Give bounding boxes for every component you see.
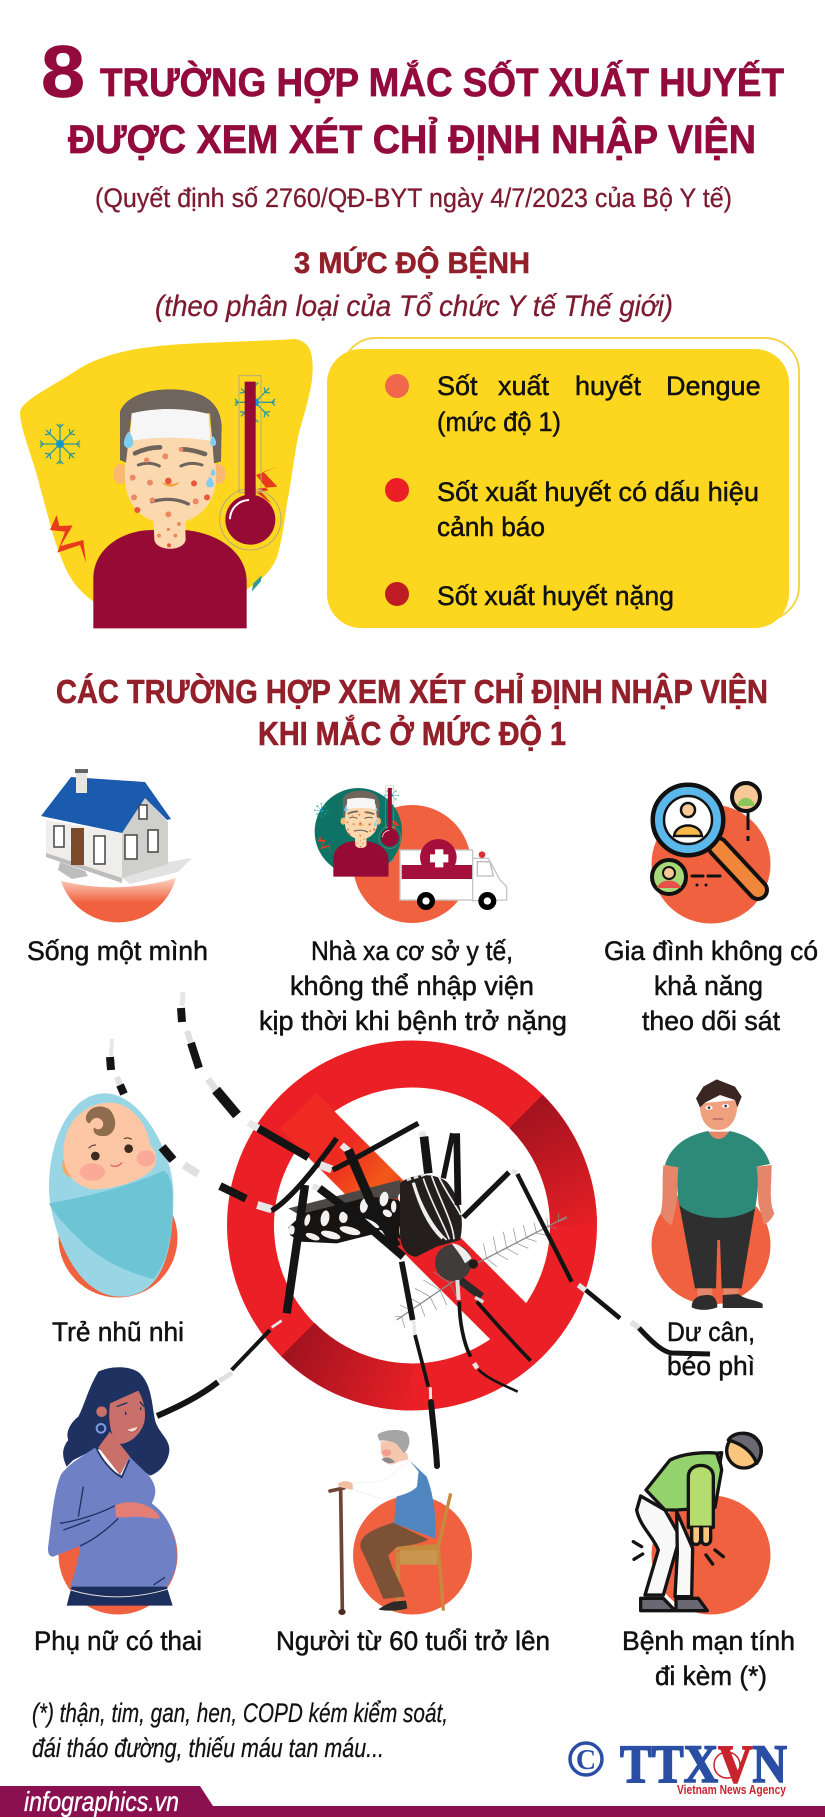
label: Trẻ nhũ nhi	[52, 1317, 184, 1347]
case: pregnant women	[34, 1367, 202, 1656]
footer text: infographics.vn	[24, 1786, 179, 1817]
icon: orange disc	[652, 1496, 770, 1614]
prohibition sign	[250, 1064, 574, 1387]
level 2 text: Sốt xuất huyết có dấu hiệu	[437, 477, 759, 507]
panel: three severity levels	[327, 338, 799, 628]
section heading	[56, 673, 768, 752]
level 1 text	[437, 371, 761, 437]
footnote	[32, 1698, 448, 1763]
mosquito head and proboscis	[435, 1243, 483, 1302]
label: Dư cân,	[667, 1317, 755, 1347]
heading: 3 levels: 3 MỨC ĐỘ BỆNH	[294, 246, 530, 280]
title: ĐƯỢC XEM XÉT CHỈ ĐỊNH NHẬP VIỆN	[68, 116, 756, 162]
footnote: (*) thận, tim, gan, hen, COPD kém kiểm soát,	[32, 1698, 448, 1728]
level 3 bullet	[385, 582, 409, 606]
label: khả năng	[654, 971, 763, 1001]
title: TRƯỜNG HỢP MẮC SỐT XUẤT HUYẾT	[100, 59, 784, 105]
level 1 text: Dengue	[666, 371, 761, 401]
heading note: (theo phân loại của Tổ chức Y tế Thế giới)	[155, 290, 673, 323]
case: living alone	[27, 769, 208, 966]
label: kịp thời khi bệnh trở nặng	[259, 1006, 567, 1036]
mosquito antennae	[395, 1213, 567, 1328]
label: theo dõi sát	[642, 1006, 780, 1036]
label: Gia đình không có	[604, 936, 818, 966]
case: family unable to monitor	[604, 783, 818, 1036]
icon: orange disc	[652, 1186, 770, 1304]
icon: orange disc	[58, 1178, 178, 1298]
section heading: KHI MẮC Ở MỨC ĐỘ 1	[258, 714, 566, 752]
level 1 text: (mức độ 1)	[437, 407, 561, 437]
mosquito wing and abdomen	[288, 1180, 430, 1246]
label: đi kèm (*)	[655, 1661, 767, 1691]
mosquito lower leg	[431, 1402, 437, 1466]
label: Nhà xa cơ sở y tế,	[311, 936, 513, 966]
title: 8	[41, 32, 85, 113]
icon: overweight man	[661, 1079, 774, 1310]
subtitle: (Quyết định số 2760/QĐ-BYT ngày 4/7/2023 của Bộ Y tế)	[95, 183, 732, 213]
label: Người từ 60 tuổi trở lên	[276, 1626, 550, 1656]
icon: elderly man on chair	[330, 1430, 451, 1615]
icon: orange disc	[652, 804, 770, 924]
icon: pregnant woman	[48, 1367, 177, 1606]
label	[604, 936, 818, 1036]
level 2 text: cảnh báo	[437, 512, 545, 542]
level 1 text: huyết	[575, 371, 642, 401]
case: infants	[49, 1093, 184, 1347]
icon: orange disc	[353, 1496, 472, 1614]
case: aged 60 and above	[276, 1430, 550, 1656]
icon: house	[41, 769, 192, 884]
title	[41, 32, 784, 162]
icon: orange disc	[58, 1496, 178, 1614]
logo: TTXVN: TTXVN	[620, 1734, 787, 1794]
logo: TTXVN: C	[576, 1745, 596, 1776]
logo: TTXVN: Vietnam News Agency	[677, 1783, 786, 1797]
footer band	[0, 1786, 825, 1817]
level 1 text: xuất	[498, 371, 550, 401]
case: far from medical facility	[259, 786, 567, 1036]
case: chronic disease	[622, 1433, 795, 1691]
icon: baby	[49, 1093, 173, 1297]
label	[622, 1626, 795, 1691]
icon: patient and ambulance	[314, 786, 507, 910]
mosquito thorax	[400, 1174, 462, 1257]
level 2 bullet	[385, 478, 409, 502]
icon: orange disc	[353, 805, 471, 923]
level 1 bullet	[385, 374, 409, 398]
illustration: sick man	[40, 376, 281, 628]
case: overweight	[652, 1079, 774, 1381]
level 1 text: Sốt	[437, 371, 478, 401]
mosquito	[220, 1100, 620, 1400]
illustration: yellow blob	[20, 339, 313, 602]
footnote: đái tháo đường, thiếu máu tan máu...	[32, 1733, 384, 1763]
label: không thể nhập viện	[290, 971, 534, 1001]
label: béo phì	[667, 1351, 755, 1381]
icon: man with knee pain	[633, 1433, 761, 1611]
mosquito legs	[220, 1100, 620, 1400]
label	[259, 936, 567, 1036]
icon: house base	[61, 878, 176, 922]
label: Sống một mình	[27, 936, 208, 966]
level 2 text	[437, 477, 759, 542]
icon: magnifier and people	[652, 783, 760, 894]
label: Phụ nữ có thai	[34, 1626, 202, 1656]
level 3 text: Sốt xuất huyết nặng	[437, 581, 674, 611]
label: Bệnh mạn tính	[622, 1626, 795, 1656]
mosquito legs outside the sign	[110, 992, 710, 1416]
label	[667, 1317, 755, 1381]
